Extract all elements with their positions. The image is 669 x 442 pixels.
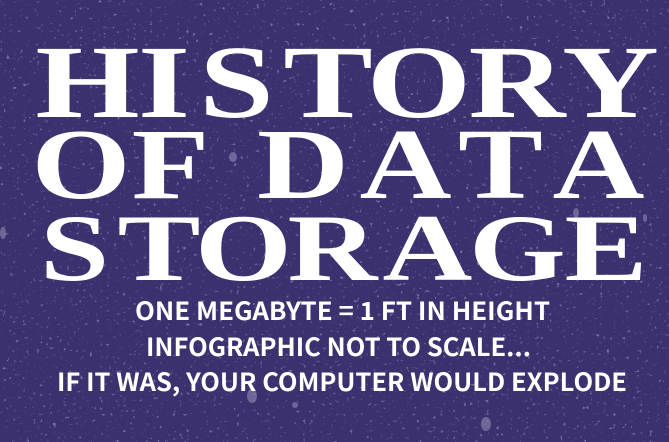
subtitle line 3: IF IT WAS, YOUR COMPUTER WOULD EXPLODE — [57, 363, 627, 399]
subtitle line 2: INFOGRAPHIC NOT TO SCALE... — [146, 328, 531, 364]
title line: HISTORY: HISTORY — [35, 24, 659, 140]
title line: STORAGE: STORAGE — [40, 195, 647, 301]
title — [32, 24, 659, 301]
title line: OF DATA: OF DATA — [31, 108, 644, 220]
subtitle line 1: ONE MEGABYTE = 1 FT IN HEIGHT — [135, 292, 550, 328]
subtitle text block — [57, 292, 627, 399]
